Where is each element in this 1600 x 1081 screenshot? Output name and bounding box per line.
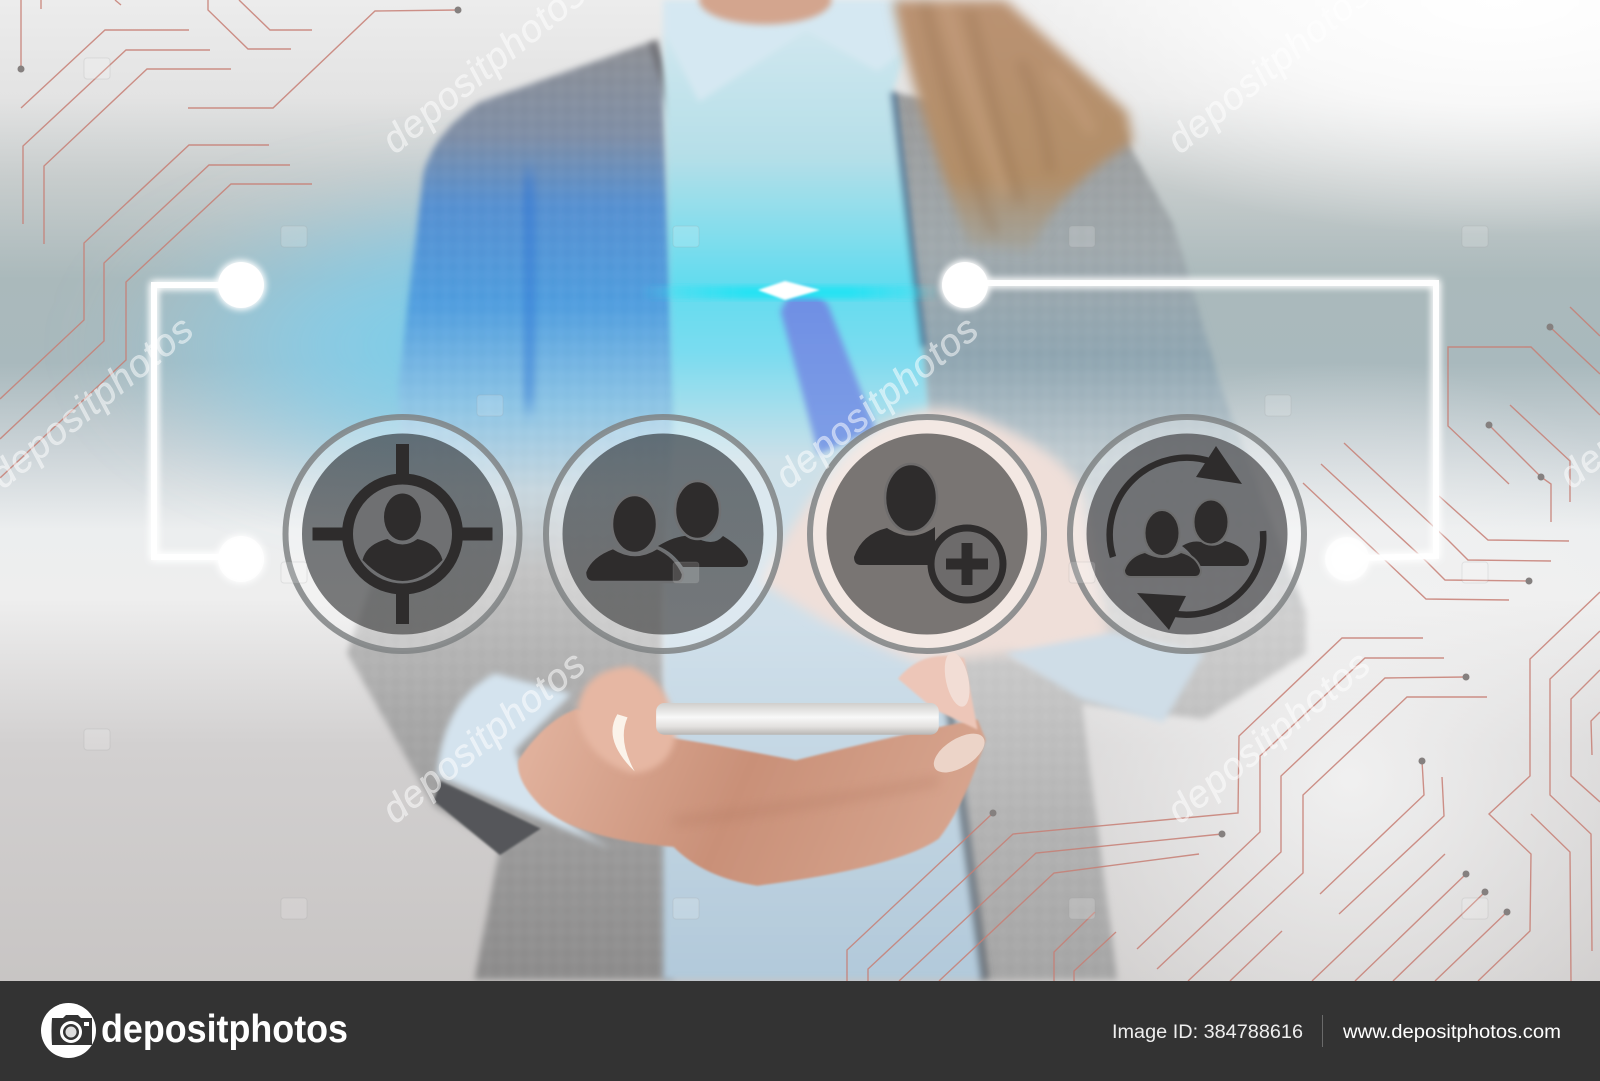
logo: camera badge bbox=[41, 1003, 96, 1058]
upper finger bbox=[898, 656, 978, 730]
depositphotos diagonal watermarks: depositphotos bbox=[374, 643, 593, 832]
depositphotos diagonal watermarks: depositphotos bbox=[767, 308, 986, 497]
glowing frame: right bracket bbox=[942, 262, 1436, 581]
fingers shading bbox=[673, 781, 939, 821]
icon: target person bbox=[286, 417, 520, 651]
image id: Image ID: 384788616 bbox=[1112, 1022, 1303, 1043]
neck bbox=[699, 0, 832, 24]
thumb bbox=[577, 666, 676, 773]
icon: add person bbox=[810, 417, 1044, 651]
icon: rotating people bbox=[1070, 417, 1304, 651]
shirt bbox=[663, 0, 985, 980]
logo wordmark: depositphotos bbox=[101, 1008, 348, 1051]
pointing finger bbox=[781, 288, 876, 454]
depositphotos diagonal watermarks: depositphotos bbox=[1159, 643, 1378, 832]
footer bar bbox=[0, 981, 1600, 1081]
fingernails bbox=[612, 650, 991, 780]
blue glow behind person bbox=[90, 165, 990, 525]
left shirt sleeve bbox=[437, 673, 612, 849]
glowing frame: left bracket bbox=[154, 262, 264, 582]
holding hand bbox=[518, 709, 986, 886]
watermark camera marks bbox=[84, 58, 1488, 919]
light flare at fingertip bbox=[640, 281, 940, 300]
person holding smartphone bbox=[347, 0, 1306, 980]
smartphone bbox=[656, 703, 939, 735]
depositphotos diagonal watermarks bbox=[0, 0, 1600, 832]
back hand behind icons bbox=[760, 409, 1112, 671]
jacket bbox=[347, 41, 1306, 980]
website url: www.depositphotos.com bbox=[1342, 1022, 1561, 1043]
icon: two people bbox=[546, 417, 780, 651]
hair bbox=[893, 0, 1133, 250]
right shirt cuff bbox=[1005, 633, 1204, 722]
left jacket cuff bbox=[434, 781, 541, 855]
